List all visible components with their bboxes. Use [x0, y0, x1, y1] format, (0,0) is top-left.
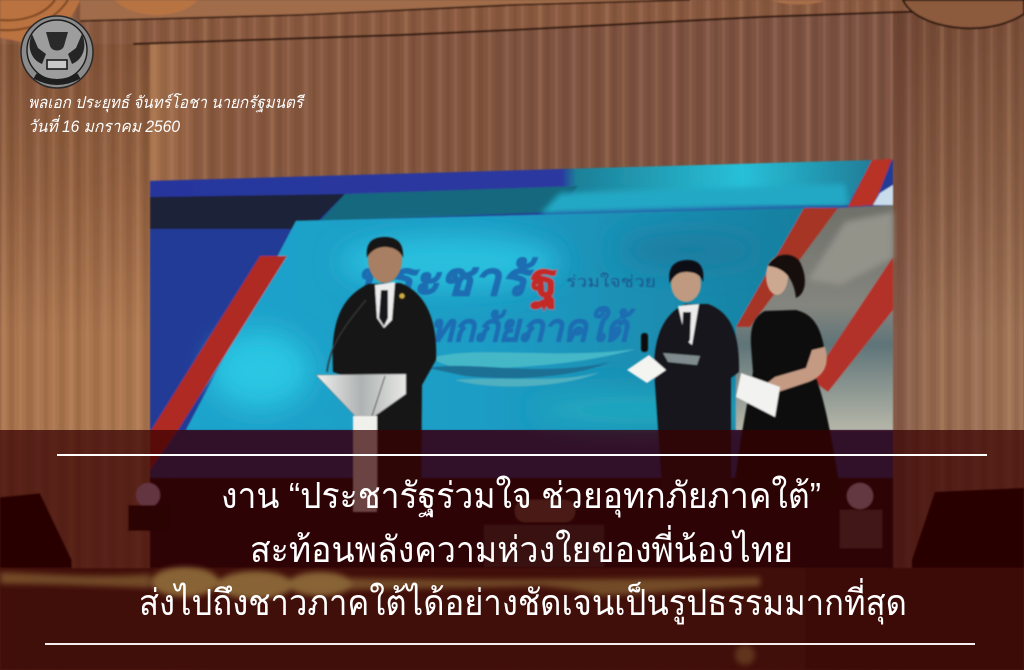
screen logo: ฐ: [530, 254, 558, 310]
screen logo: ประชารั: [355, 253, 538, 305]
central cyan panel: [186, 208, 804, 430]
speaker right: [912, 488, 1024, 570]
speaker left: [0, 493, 72, 570]
teal haze behind band: [540, 184, 848, 214]
headline line 3: ส่งไปถึงชาวภาคใต้ได้อย่างชัดเจนเป็นรูปธรรมมากที่สุด: [139, 578, 907, 625]
person: male host: [627, 260, 739, 500]
emblem: government seal: [21, 16, 93, 88]
dark navy strip: [150, 194, 345, 229]
red diagonal stripes: [150, 256, 287, 470]
top blue and teal band: [150, 160, 872, 205]
stage foreground: [0, 430, 1024, 670]
grey storm panel: [736, 205, 893, 430]
headline line 2: สะท้อนพลังความห่วงใยของพี่น้องไทย: [250, 525, 793, 570]
lectern: [316, 374, 406, 512]
screen logo: ร่วมใจช่วย: [566, 272, 656, 291]
name line: พลเอก ประยุทธ์ จันทร์โอชา นายกรัฐมนตรี: [28, 93, 305, 113]
cyan glow patches: [210, 234, 760, 428]
headline text: [139, 475, 907, 625]
bottom rule: [45, 643, 975, 645]
microphone and cue cards: [627, 333, 700, 383]
top rule: [57, 454, 987, 456]
LED screen: [150, 159, 893, 480]
microphone: [327, 300, 366, 372]
gold console ornament: [0, 567, 760, 665]
caption: speaker name and date: [28, 93, 305, 136]
date line: วันที่ 16 มกราคม 2560: [28, 115, 181, 136]
person: female host: [733, 255, 842, 500]
console front: [0, 568, 1024, 670]
screen logo: ทกภัยภาคใต้: [430, 306, 636, 350]
headline line 1: งาน “ประชารัฐร่วมใจ ช่วยอุทกภัยภาคใต้”: [221, 475, 821, 518]
caption overlay band: [0, 430, 1024, 670]
screen base: [150, 160, 893, 480]
screen logo: [355, 253, 656, 386]
stage lights: [128, 483, 882, 567]
curtain valance: [0, 0, 1024, 44]
person: speaker at lectern: [316, 237, 436, 512]
